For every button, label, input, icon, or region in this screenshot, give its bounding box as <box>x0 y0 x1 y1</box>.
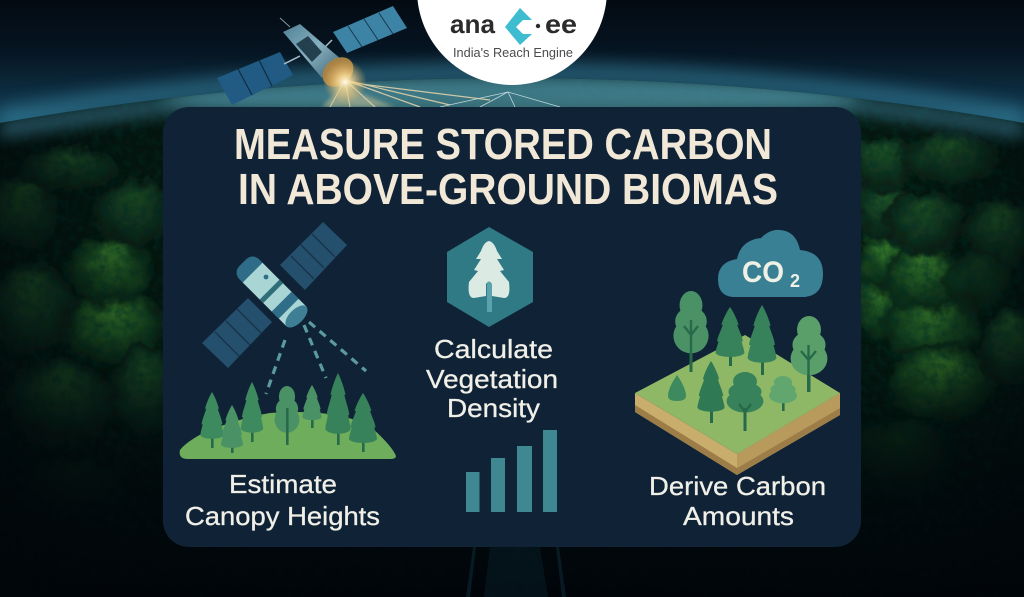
tagline: India's Reach Engine <box>453 45 573 60</box>
icon: CO2 cloud: CO <box>742 256 784 289</box>
icon: CO2 cloud <box>718 230 823 297</box>
title: IN ABOVE-GROUND BIOMAS <box>238 165 778 214</box>
label: derive carbon amounts: Amounts <box>683 501 794 531</box>
photo satellite <box>217 6 407 105</box>
icon: tree in hexagon <box>447 227 533 327</box>
satellite laser beams <box>322 80 560 107</box>
label: calculate vegetation density: Calculate <box>434 334 553 364</box>
label: estimate canopy heights <box>185 469 380 531</box>
label: calculate vegetation density: Vegetation <box>426 364 558 394</box>
bar chart <box>466 430 557 512</box>
icon: satellite with lidar beams <box>202 222 366 394</box>
logo badge <box>417 0 607 85</box>
main panel <box>163 107 861 547</box>
logo wordmark <box>450 8 577 45</box>
label: estimate canopy heights: Estimate <box>229 469 337 499</box>
icon: isometric forest block <box>635 291 840 475</box>
title: MEASURE STORED CARBON <box>234 120 772 169</box>
column: calculate vegetation density <box>426 227 558 512</box>
label: derive carbon amounts <box>649 471 826 531</box>
label: calculate vegetation density: Density <box>447 393 540 423</box>
icon: CO2 cloud: 2 <box>790 271 800 291</box>
label: estimate canopy heights: Canopy Heights <box>185 501 380 531</box>
logo wordmark: ee <box>545 9 577 39</box>
logo wordmark: ana <box>450 9 496 39</box>
icon: forest on green hill <box>180 373 396 459</box>
road streaks below the panel <box>466 547 566 597</box>
title <box>234 120 778 214</box>
label: derive carbon amounts: Derive Carbon <box>649 471 826 501</box>
column: derive carbon amounts <box>635 230 840 531</box>
column: estimate canopy heights <box>180 222 396 531</box>
background: night sky <box>0 0 1024 130</box>
background: forest canopy <box>0 27 1024 491</box>
label: calculate vegetation density <box>426 334 558 423</box>
